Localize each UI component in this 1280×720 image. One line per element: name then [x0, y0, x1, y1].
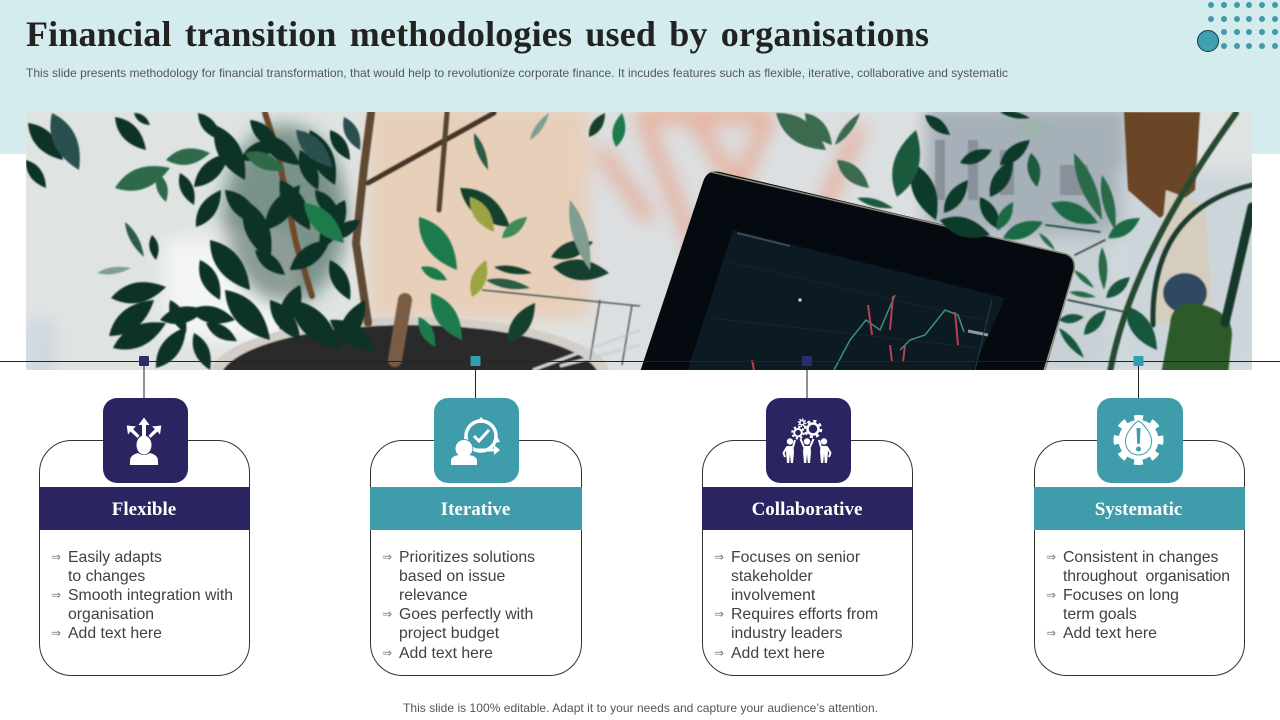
bullet list: Easily adapts	[68, 549, 162, 566]
icon: person with diverging arrows	[127, 418, 161, 465]
bullet list: industry leaders	[731, 625, 843, 642]
connector and node	[1134, 356, 1144, 399]
right plant leaves	[769, 104, 1165, 360]
icon: team raising gears	[784, 419, 830, 463]
bullet list	[714, 549, 878, 662]
bullet list: ⇒	[382, 550, 392, 564]
icon tile	[766, 398, 851, 483]
card outline	[40, 440, 250, 676]
panel: Collaborative	[702, 356, 913, 676]
icon tile	[103, 398, 188, 483]
bullet list	[51, 549, 233, 642]
icon: gear with warning drop	[1117, 418, 1160, 462]
heading: Systematic	[1095, 499, 1182, 520]
photo: plants and laptop showing a trading chart	[26, 112, 1252, 370]
connector and node	[139, 356, 149, 399]
bullet list: ⇒	[1046, 550, 1056, 564]
bullet list: ⇒	[1046, 626, 1056, 640]
connector and node	[470, 356, 480, 399]
subtitle: This slide presents methodology for financial transformation, that would help to revolutionize corporate finance. It incudes features such as flexible, iterative, collaborative and systematic	[26, 66, 1008, 80]
bullet list	[1046, 549, 1230, 642]
laptop	[640, 171, 1074, 372]
bullet list: relevance	[399, 587, 468, 604]
bullet list: Add text here	[1063, 625, 1157, 642]
bullet list: ⇒	[51, 550, 61, 564]
card outline	[1034, 440, 1244, 676]
blurred lettering shapes in background	[935, 140, 1088, 200]
bullet list: Add text here	[731, 645, 825, 662]
bullet list: project budget	[399, 625, 500, 642]
card outline	[702, 440, 912, 676]
header bar	[1034, 487, 1245, 530]
bullet list: Requires efforts from	[731, 606, 878, 623]
bullet list: ⇒	[382, 646, 392, 660]
bullet list: Add text here	[399, 645, 493, 662]
connector and node	[802, 356, 812, 399]
bullet list: ⇒	[51, 626, 61, 640]
bullet list: ⇒	[51, 588, 61, 602]
heading: Flexible	[112, 499, 176, 520]
heading: Iterative	[441, 499, 510, 520]
bullet list: stakeholder	[731, 568, 813, 585]
long stems	[1110, 113, 1252, 372]
bullet list: ⇒	[1046, 588, 1056, 602]
bullet list: Consistent in changes	[1063, 549, 1219, 566]
bullet list: organisation	[68, 606, 154, 623]
bullet list: Focuses on senior	[731, 549, 860, 566]
trading chart candles	[752, 295, 992, 370]
footer note: This slide is 100% editable. Adapt it to your needs and capture your audience’s attention.	[403, 701, 878, 715]
header bar	[702, 487, 913, 530]
icon tile	[434, 398, 519, 483]
soil pot and basket	[210, 288, 641, 370]
bullet list: involvement	[731, 587, 816, 604]
card outline	[370, 440, 582, 676]
title: Financial transition methodologies used by organisations	[26, 14, 929, 54]
icon tile	[1097, 398, 1183, 483]
bullet list: throughout organisation	[1063, 568, 1230, 585]
header bar	[39, 487, 250, 530]
header band	[0, 0, 1280, 154]
icon: person with cycle and check	[451, 417, 500, 465]
bullet list: Focuses on long	[1063, 587, 1179, 604]
branches	[265, 113, 494, 360]
bullet list: ⇒	[714, 646, 724, 660]
bullet list	[382, 549, 535, 662]
bullet list: Smooth integration with	[68, 587, 233, 604]
rope and plant tag	[1124, 112, 1232, 375]
bullet list: ⇒	[382, 607, 392, 621]
heading: Collaborative	[752, 499, 862, 520]
left plant leaves	[21, 108, 628, 373]
decorative dot grid	[1208, 2, 1278, 49]
bullet list: based on issue	[399, 568, 505, 585]
horizontal timeline line	[0, 361, 1280, 362]
panel: Systematic	[1034, 356, 1245, 676]
decorative teal circle	[1198, 30, 1218, 52]
bullet list: ⇒	[714, 550, 724, 564]
bullet list: Prioritizes solutions	[399, 549, 535, 566]
panel: Iterative	[370, 356, 582, 676]
bullet list: Goes perfectly with	[399, 606, 533, 623]
bullet list: to changes	[68, 568, 145, 585]
bullet list: ⇒	[714, 607, 724, 621]
panel: Flexible	[39, 356, 250, 676]
bullet list: Add text here	[68, 625, 162, 642]
bullet list: term goals	[1063, 606, 1137, 623]
header bar	[370, 487, 582, 530]
